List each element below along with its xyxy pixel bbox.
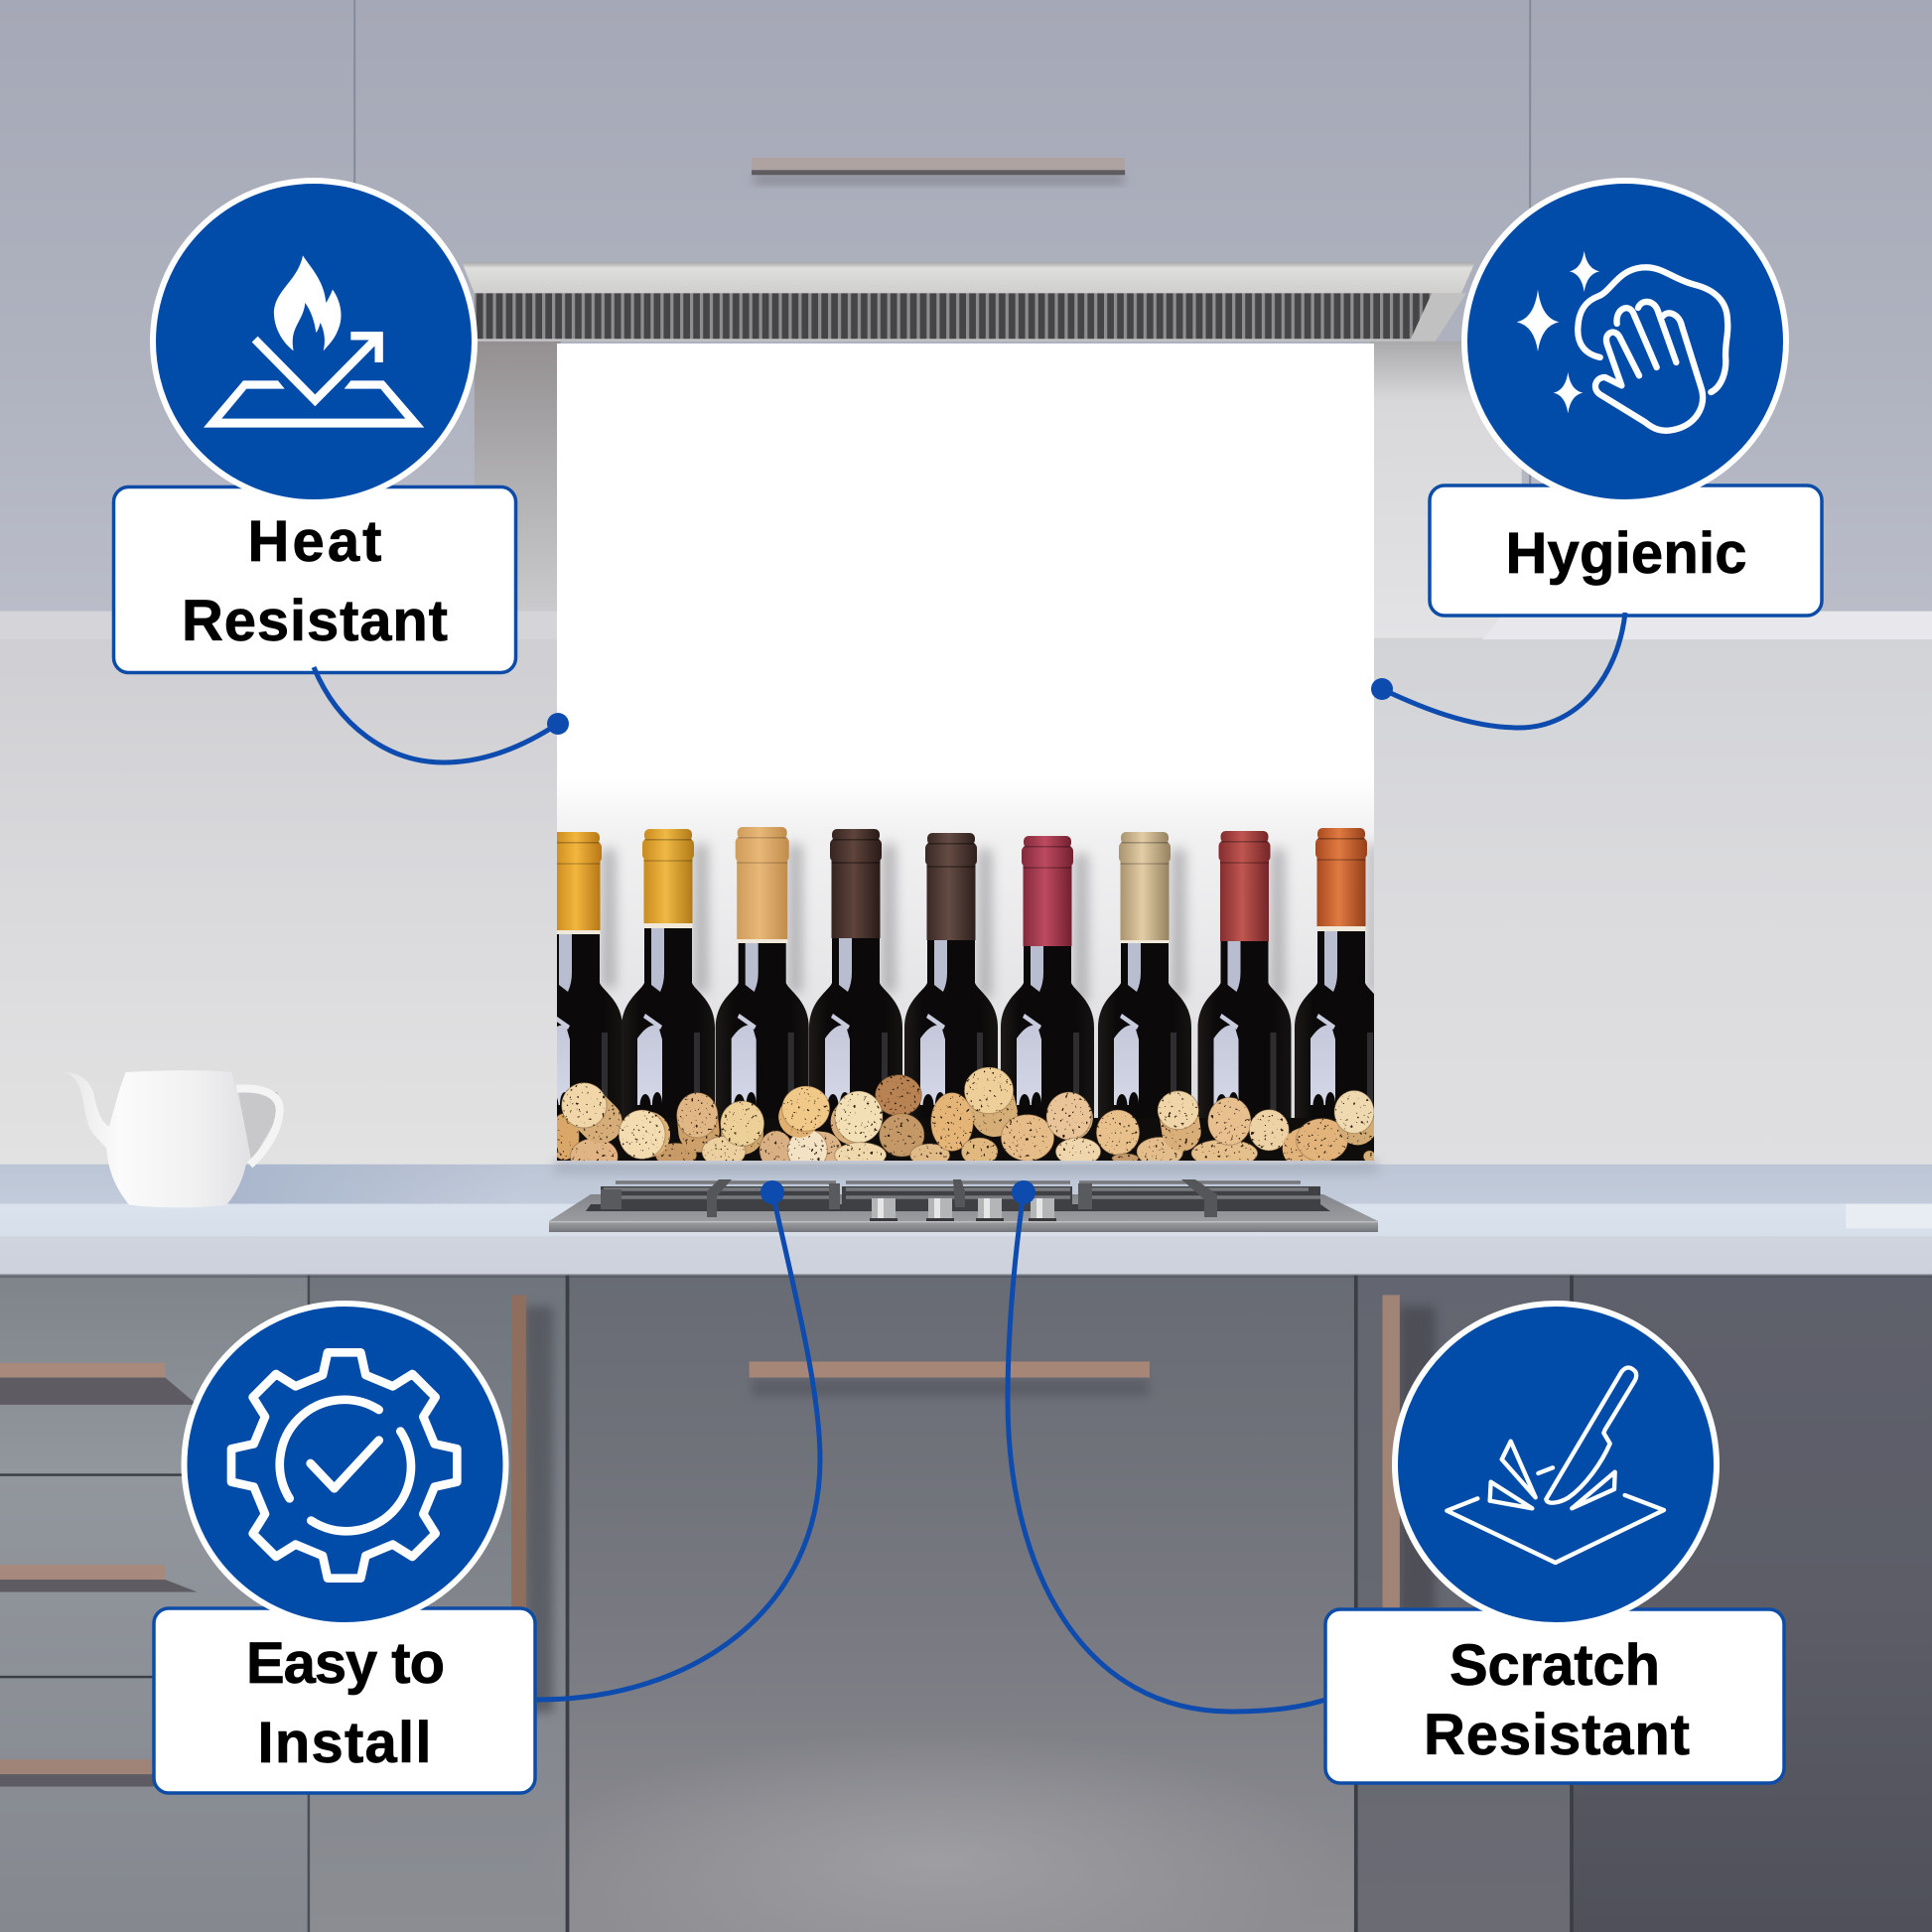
bottle: dark brown — [809, 829, 902, 1118]
right burner grate — [1078, 1179, 1320, 1217]
corks left half — [557, 1074, 974, 1161]
bottle: orange — [1295, 828, 1374, 1118]
cabinet handles — [0, 1295, 1436, 1787]
wall right of panel — [1370, 342, 1528, 638]
burner recess — [586, 1204, 1330, 1211]
hob front lip — [549, 1221, 1378, 1232]
label box — [1325, 1609, 1784, 1783]
label text: Hygienic — [1505, 521, 1747, 586]
badge circle — [1464, 181, 1786, 502]
wall left — [0, 638, 1374, 1169]
teapot handle — [236, 1088, 280, 1165]
callout: Scratch Resistant: Resistant — [1424, 1703, 1690, 1767]
callout: Scratch Resistant — [1325, 1304, 1784, 1783]
connector: Hygienic to panel — [1371, 613, 1625, 728]
icon: gear with check — [231, 1352, 457, 1579]
top cabinet handle — [752, 158, 1125, 184]
callout: Easy to Install: Install — [258, 1711, 431, 1775]
badge circle — [185, 1304, 506, 1625]
connector: Heat Resistant to panel — [314, 667, 569, 762]
label box — [113, 486, 516, 673]
panel white ground — [557, 344, 1374, 999]
bottle: brown — [904, 833, 998, 1118]
bottle: red — [1197, 831, 1291, 1118]
control knobs — [870, 1198, 1056, 1221]
bottle: gold left — [557, 832, 621, 1117]
bottle: champagne — [1098, 832, 1191, 1118]
base cabinets — [0, 1274, 1932, 1932]
icon: knife scratching surface — [1447, 1367, 1664, 1563]
countertop — [0, 1160, 1932, 1276]
corks right half — [961, 1067, 1375, 1168]
splashback panel with wine bottles — [529, 344, 1388, 1174]
icon: flame over surface — [204, 255, 424, 428]
shadow inside handle — [238, 1092, 278, 1162]
bottle: gold — [621, 829, 715, 1118]
bottle: burgundy — [1001, 836, 1094, 1118]
cooker hood — [462, 262, 1475, 342]
left burner grate — [601, 1179, 840, 1217]
callout: Heat Resistant — [113, 181, 516, 673]
hob plate — [549, 1194, 1378, 1221]
bottle shadows — [602, 844, 1378, 1003]
upper cabinets — [0, 0, 1932, 613]
wall shadow left of panel — [475, 342, 561, 615]
badge circle — [153, 181, 475, 502]
middle burner grate — [842, 1179, 1072, 1210]
under cabinet strips — [0, 612, 561, 639]
wall right — [1374, 638, 1932, 1169]
wine corks — [557, 1067, 1374, 1161]
label box — [154, 1608, 535, 1793]
label text: Scratch — [1449, 1633, 1660, 1698]
label text: Easy to — [246, 1631, 445, 1696]
bottle: tan — [715, 827, 809, 1118]
callout: Hygienic — [1430, 181, 1822, 616]
icon: hand wiping with sparkles — [1517, 251, 1727, 431]
teapot — [65, 1070, 280, 1207]
teapot body — [65, 1070, 248, 1207]
dark gap under corks — [621, 1118, 1301, 1161]
callout: Heat Resistant: Resistant — [182, 589, 448, 653]
callout: Easy to Install — [154, 1304, 535, 1793]
label box — [1430, 485, 1822, 616]
gas hob — [549, 1179, 1378, 1232]
badge circle — [1395, 1304, 1717, 1625]
connector: Scratch Resistant to hob — [1008, 1180, 1325, 1712]
label text: Heat — [248, 509, 381, 574]
connector: Easy to Install to hob — [537, 1180, 820, 1700]
